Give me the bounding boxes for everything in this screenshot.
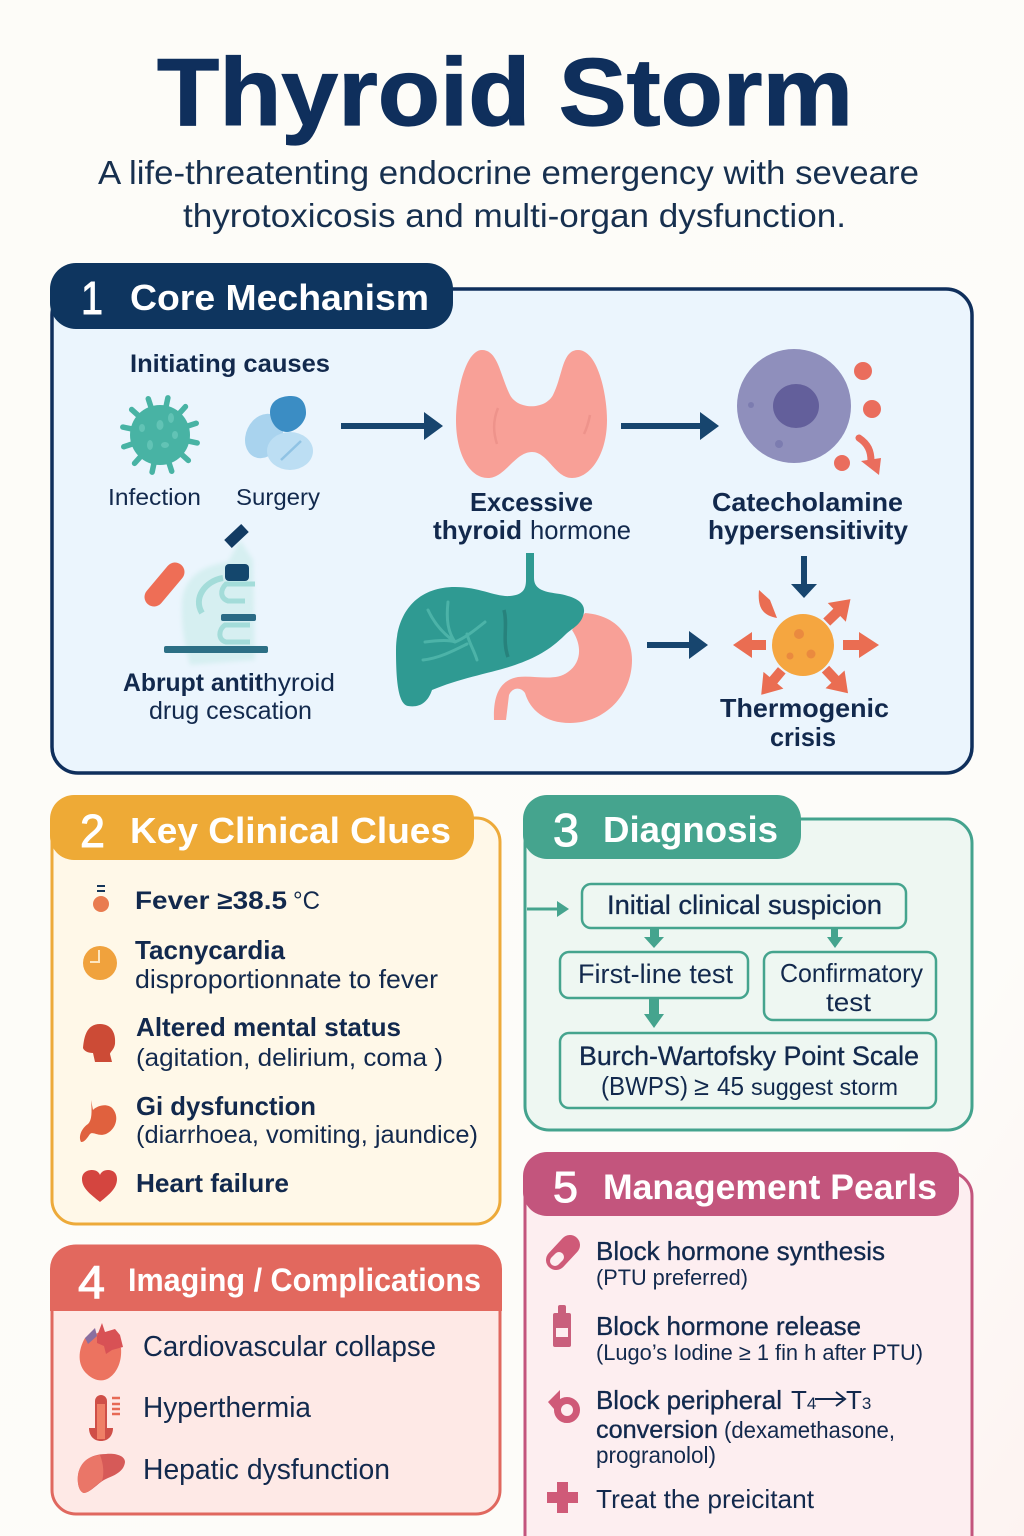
subtitle: thyrotoxicosis and multi-organ dysfunction. xyxy=(183,197,846,234)
header tab: diagnosis xyxy=(523,795,801,859)
item: block hormone release xyxy=(553,1305,923,1365)
label: excessive thyroid hormone: hormone xyxy=(530,515,631,545)
header tab: management pearls xyxy=(523,1152,959,1216)
header tab: core mechanism xyxy=(50,263,453,329)
label: abrupt antithyroid drug cessation: Abrupt antit xyxy=(123,669,264,697)
item: block peripheral conversion: Block peripheral xyxy=(596,1385,782,1415)
label: abrupt antithyroid drug cessation: drug cescation xyxy=(149,697,312,725)
box: burch-wartofsky point scale: Burch-Wartofsky Point Scale xyxy=(579,1041,919,1071)
label: abrupt antithyroid drug cessation: hyroid xyxy=(263,669,335,697)
item: block hormone synthesis: (PTU preferred) xyxy=(596,1265,748,1290)
arrow: causes to thyroid xyxy=(341,412,443,440)
subtitle xyxy=(98,154,919,234)
item: hepatic dysfunction xyxy=(78,1454,390,1493)
icon: thyroid gland xyxy=(456,350,607,478)
label: infection: Infection xyxy=(108,484,201,510)
item: heart failure: Heart failure xyxy=(136,1168,289,1198)
item: tachycardia xyxy=(83,935,438,994)
item: altered mental status xyxy=(83,1012,443,1072)
arrow: first-line to score xyxy=(644,998,664,1028)
item: block peripheral conversion: T4 xyxy=(791,1385,816,1415)
box: initial clinical suspicion xyxy=(582,884,906,928)
item: block peripheral conversion xyxy=(548,1385,895,1468)
header band: imaging / complications xyxy=(50,1245,502,1311)
item: cardiovascular collapse: Cardiovascular collapse xyxy=(143,1331,436,1363)
arrow: organs to crisis xyxy=(647,631,708,659)
panel frame xyxy=(52,818,500,1224)
item: fever xyxy=(93,885,320,915)
box: burch-wartofsky point scale: 45 xyxy=(717,1071,744,1101)
header tab: key clinical clues: Key Clinical Clues xyxy=(130,810,451,851)
item: cardiovascular collapse xyxy=(80,1323,436,1380)
header band: imaging / complications: 4 xyxy=(78,1256,105,1308)
header tab: core mechanism: 1 xyxy=(81,272,103,324)
label: abrupt antithyroid drug cessation xyxy=(123,669,335,725)
header tab: key clinical clues: 2 xyxy=(80,805,105,857)
header tab: management pearls: Management Pearls xyxy=(603,1168,937,1207)
box: confirmatory test: test xyxy=(826,987,872,1017)
arrow: suspicion to first-line xyxy=(644,928,664,948)
item: hyperthermia: Hyperthermia xyxy=(143,1392,312,1424)
box: burch-wartofsky point scale: (BWPS) xyxy=(601,1071,688,1101)
label: thermogenic crisis: Thermogenic xyxy=(720,693,889,723)
icon: target cell and catecholamines xyxy=(737,349,881,475)
box: burch-wartofsky point scale xyxy=(560,1033,936,1108)
label: thermogenic crisis xyxy=(720,693,889,752)
arrow: into flowchart xyxy=(527,901,569,917)
panel: core mechanism xyxy=(50,263,972,773)
box: first-line test: First-line test xyxy=(578,959,733,989)
item: tachycardia: Tacnycardia xyxy=(135,935,286,965)
panel: diagnosis xyxy=(523,795,972,1130)
item: block hormone release: (Lugo’s Iodine ≥ 1 fin h after PTU) xyxy=(596,1340,923,1365)
item: block peripheral conversion: progranolol) xyxy=(596,1442,716,1468)
title: Thyroid Storm xyxy=(157,39,853,146)
item: altered mental status: Altered mental status xyxy=(136,1012,401,1042)
header tab: core mechanism: Core Mechanism xyxy=(130,277,429,318)
item: block peripheral conversion: T3 xyxy=(846,1385,871,1415)
panel: imaging and complications xyxy=(50,1245,502,1514)
arrow: cell down to crisis xyxy=(791,556,817,598)
header band: imaging / complications: Imaging / Complications xyxy=(128,1262,481,1298)
panel frame xyxy=(52,289,972,773)
box: burch-wartofsky point scale: suggest storm xyxy=(751,1074,898,1100)
item: block hormone synthesis xyxy=(555,1236,885,1290)
box: initial clinical suspicion: Initial clinical suspicion xyxy=(607,890,882,920)
item: heart failure xyxy=(82,1168,289,1202)
item: block peripheral conversion: (dexamethasone, xyxy=(724,1417,895,1443)
arrow: suspicion to confirmatory xyxy=(827,928,843,948)
icon: thermogenic crisis burst xyxy=(733,590,879,703)
header tab: diagnosis: Diagnosis xyxy=(603,809,778,850)
icon: liver and stomach xyxy=(396,553,632,723)
item: block peripheral conversion: conversion xyxy=(596,1416,718,1444)
arrow: thyroid to cell xyxy=(621,412,719,440)
label: catecholamine hypersensitivity: hypersensitivity xyxy=(708,515,909,545)
item: altered mental status: (agitation, delirium, coma ) xyxy=(136,1044,443,1072)
item: fever: Fever ≥38.5 xyxy=(135,887,287,915)
arrow: t4 to t3 xyxy=(815,1392,845,1406)
heading: initiating causes: Initiating causes xyxy=(130,350,330,378)
subtitle: A life-threatenting endocrine emergency with seveare xyxy=(98,154,919,191)
box: confirmatory test: Confirmatory xyxy=(780,958,923,988)
item: hepatic dysfunction: Hepatic dysfunction xyxy=(143,1454,390,1486)
box: burch-wartofsky point scale: ≥ xyxy=(694,1071,709,1101)
label: surgery: Surgery xyxy=(236,484,321,510)
icon: microscope and pill xyxy=(154,528,268,665)
panel: key clinical clues xyxy=(50,795,500,1224)
box: confirmatory test xyxy=(764,952,936,1020)
item: hyperthermia xyxy=(89,1392,312,1441)
label: excessive thyroid hormone: Excessive xyxy=(470,487,593,517)
item: tachycardia: disproportionnate to fever xyxy=(135,964,438,994)
label: catecholamine hypersensitivity: Catecholamine xyxy=(712,487,903,517)
panel frame xyxy=(52,1246,500,1514)
item: gi dysfunction xyxy=(80,1091,478,1149)
label: excessive thyroid hormone xyxy=(433,487,631,545)
icon: infection virus xyxy=(115,390,205,480)
item: block hormone synthesis: Block hormone synthesis xyxy=(596,1236,885,1266)
panel frame xyxy=(525,1172,972,1536)
icon: surgery pills xyxy=(238,396,313,470)
item: fever: °C xyxy=(293,887,320,915)
item: gi dysfunction: Gi dysfunction xyxy=(136,1091,316,1121)
item: gi dysfunction: (diarrhoea, vomiting, jaundice) xyxy=(136,1121,478,1149)
label: excessive thyroid hormone: thyroid xyxy=(433,515,522,545)
header tab: diagnosis: 3 xyxy=(553,804,579,856)
item: block hormone release: Block hormone release xyxy=(596,1311,861,1341)
box: first-line test xyxy=(560,952,748,998)
header tab: key clinical clues xyxy=(50,795,474,860)
header tab: management pearls: 5 xyxy=(553,1163,578,1212)
panel frame xyxy=(525,819,972,1130)
label: catecholamine hypersensitivity xyxy=(708,487,909,545)
label: thermogenic crisis: crisis xyxy=(770,722,836,752)
panel: management pearls xyxy=(523,1152,972,1536)
item: treat the precipitant: Treat the preicitant xyxy=(596,1484,815,1514)
